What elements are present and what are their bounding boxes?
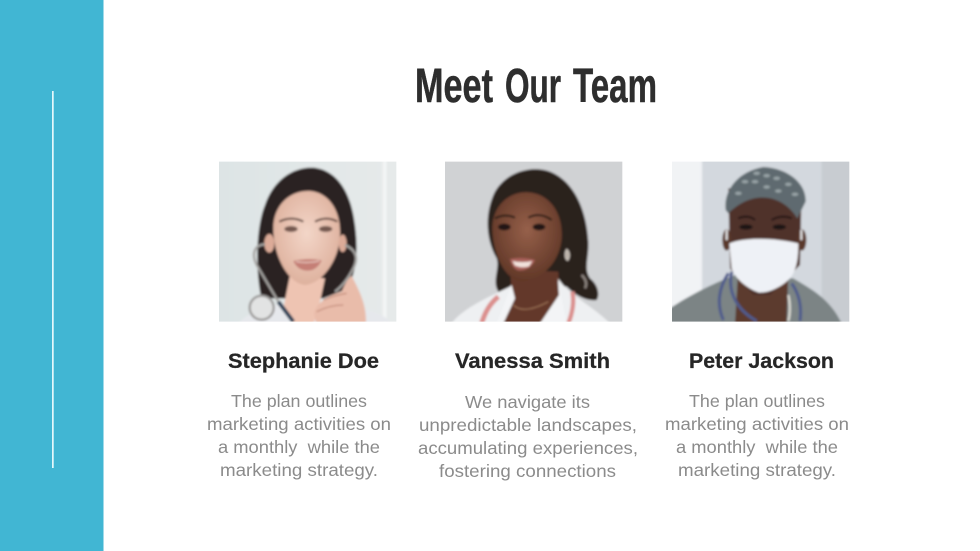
photo: Vanessa Smith [442,158,625,325]
title: Meet [415,60,493,113]
description: Peter Jackson: marketing activities on [665,414,849,434]
description: Peter Jackson: The plan outlines [689,391,825,411]
description: Stephanie Doe: marketing activities on [207,414,391,434]
panel: Peter Jackson [665,158,853,480]
description: Peter Jackson: marketing strategy. [678,460,836,480]
photo: Stephanie Doe [217,158,400,325]
title [415,60,657,113]
description: Peter Jackson [665,391,849,480]
description: Vanessa Smith: We navigate its [465,392,590,412]
description: Stephanie Doe: marketing strategy. [220,460,378,480]
panel: Vanessa Smith [418,158,638,481]
sidebar vertical line [52,91,54,468]
description: Vanessa Smith: fostering connections [439,461,616,481]
description: Vanessa Smith: unpredictable landscapes, [419,415,637,435]
title: Team [573,60,657,113]
description: Stephanie Doe: The plan outlines [231,391,367,411]
panel: Stephanie Doe [207,158,400,480]
photo: Peter Jackson [667,158,853,325]
name: Stephanie Doe: Stephanie Doe [228,350,379,373]
description: Vanessa Smith: accumulating experiences, [418,438,638,458]
description: Stephanie Doe [207,391,391,480]
description: Stephanie Doe: a monthly while the [218,437,380,457]
description: Peter Jackson: a monthly while the [676,437,838,457]
name: Peter Jackson: Peter Jackson [689,350,834,373]
name: Vanessa Smith: Vanessa Smith [455,350,610,373]
sidebar panel [0,0,104,551]
title: Our [505,60,561,113]
description: Vanessa Smith [418,392,638,481]
